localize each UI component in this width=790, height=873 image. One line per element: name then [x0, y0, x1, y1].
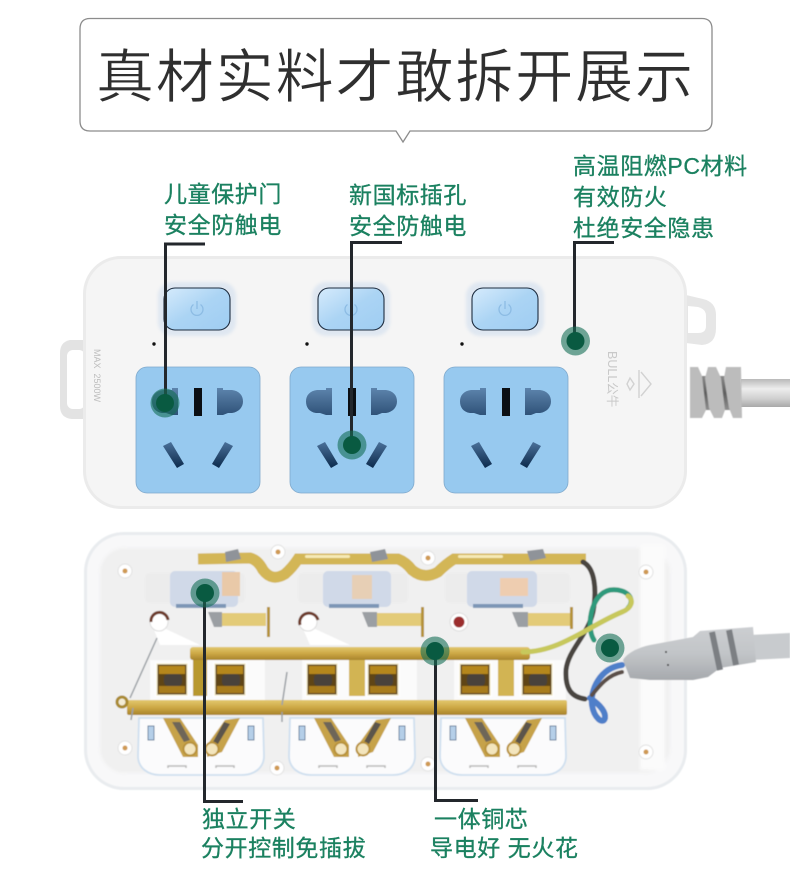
callout: national standard socket hole [338, 182, 467, 460]
label: 分开控制免插拔 [201, 835, 366, 861]
label [430, 806, 579, 861]
power strip exterior [60, 256, 790, 509]
switch 1 [158, 282, 236, 336]
socket 3 [444, 367, 568, 493]
upper brass bus bar [198, 549, 586, 577]
title speech bubble [80, 18, 712, 142]
marker dot [150, 388, 180, 418]
white socket frames [150, 660, 566, 700]
socket cavities [155, 662, 189, 697]
callout: independent switch [190, 578, 366, 861]
label: 高温阻燃PC材料 [573, 153, 748, 179]
label: 一体铜芯 [434, 806, 528, 832]
indicator lamp holders [150, 612, 468, 645]
leader line [166, 244, 205, 403]
leader line [352, 242, 402, 445]
opened power strip interior [84, 532, 790, 790]
marker dot [561, 326, 590, 356]
switch 2 [312, 282, 390, 336]
leader line [204, 593, 243, 802]
label [201, 806, 366, 861]
callout: flame retardant PC material [561, 153, 748, 356]
label: 儿童保护门 [164, 181, 282, 207]
marker dot [190, 578, 220, 608]
leader line [574, 242, 614, 341]
label [164, 181, 282, 238]
right hanging tab [686, 295, 716, 345]
brand logo [605, 351, 651, 407]
callout: child safety door [150, 181, 282, 418]
strip body [83, 256, 687, 509]
power cable with strain relief [623, 627, 790, 680]
socket 1 [136, 367, 260, 493]
power cord [690, 367, 790, 418]
transparent switch blocks [145, 571, 570, 608]
switch contact strips [208, 607, 573, 637]
brand logo: BULL公牛 [605, 351, 620, 407]
left hanging tab [60, 340, 85, 419]
label [573, 153, 748, 241]
title: 真材实料才敢拆开展示 [96, 30, 693, 114]
label: 导电好 无火花 [430, 835, 579, 861]
label: 独立开关 [202, 806, 296, 832]
label [349, 182, 467, 239]
lower socket housings [138, 718, 264, 775]
switch 3 [466, 282, 544, 336]
marker dot [338, 430, 366, 460]
callout: one-piece copper core [420, 636, 579, 861]
label: 杜绝安全隐患 [573, 215, 715, 241]
label: 新国标插孔 [349, 182, 467, 208]
housing [84, 532, 687, 790]
rating text: MAX 2500W [92, 349, 102, 403]
marker dot [420, 636, 450, 666]
lower brass bar [117, 638, 567, 722]
label: 有效防火 [573, 184, 667, 210]
wires [523, 562, 631, 721]
socket 2 [290, 367, 414, 493]
middle brass bar [190, 647, 530, 696]
screw posts [118, 545, 653, 775]
label: 安全防触电 [164, 212, 282, 238]
label: 安全防触电 [349, 213, 467, 239]
indicator dots [152, 342, 464, 346]
marker: cable entry [596, 634, 624, 662]
leader line [436, 651, 478, 800]
